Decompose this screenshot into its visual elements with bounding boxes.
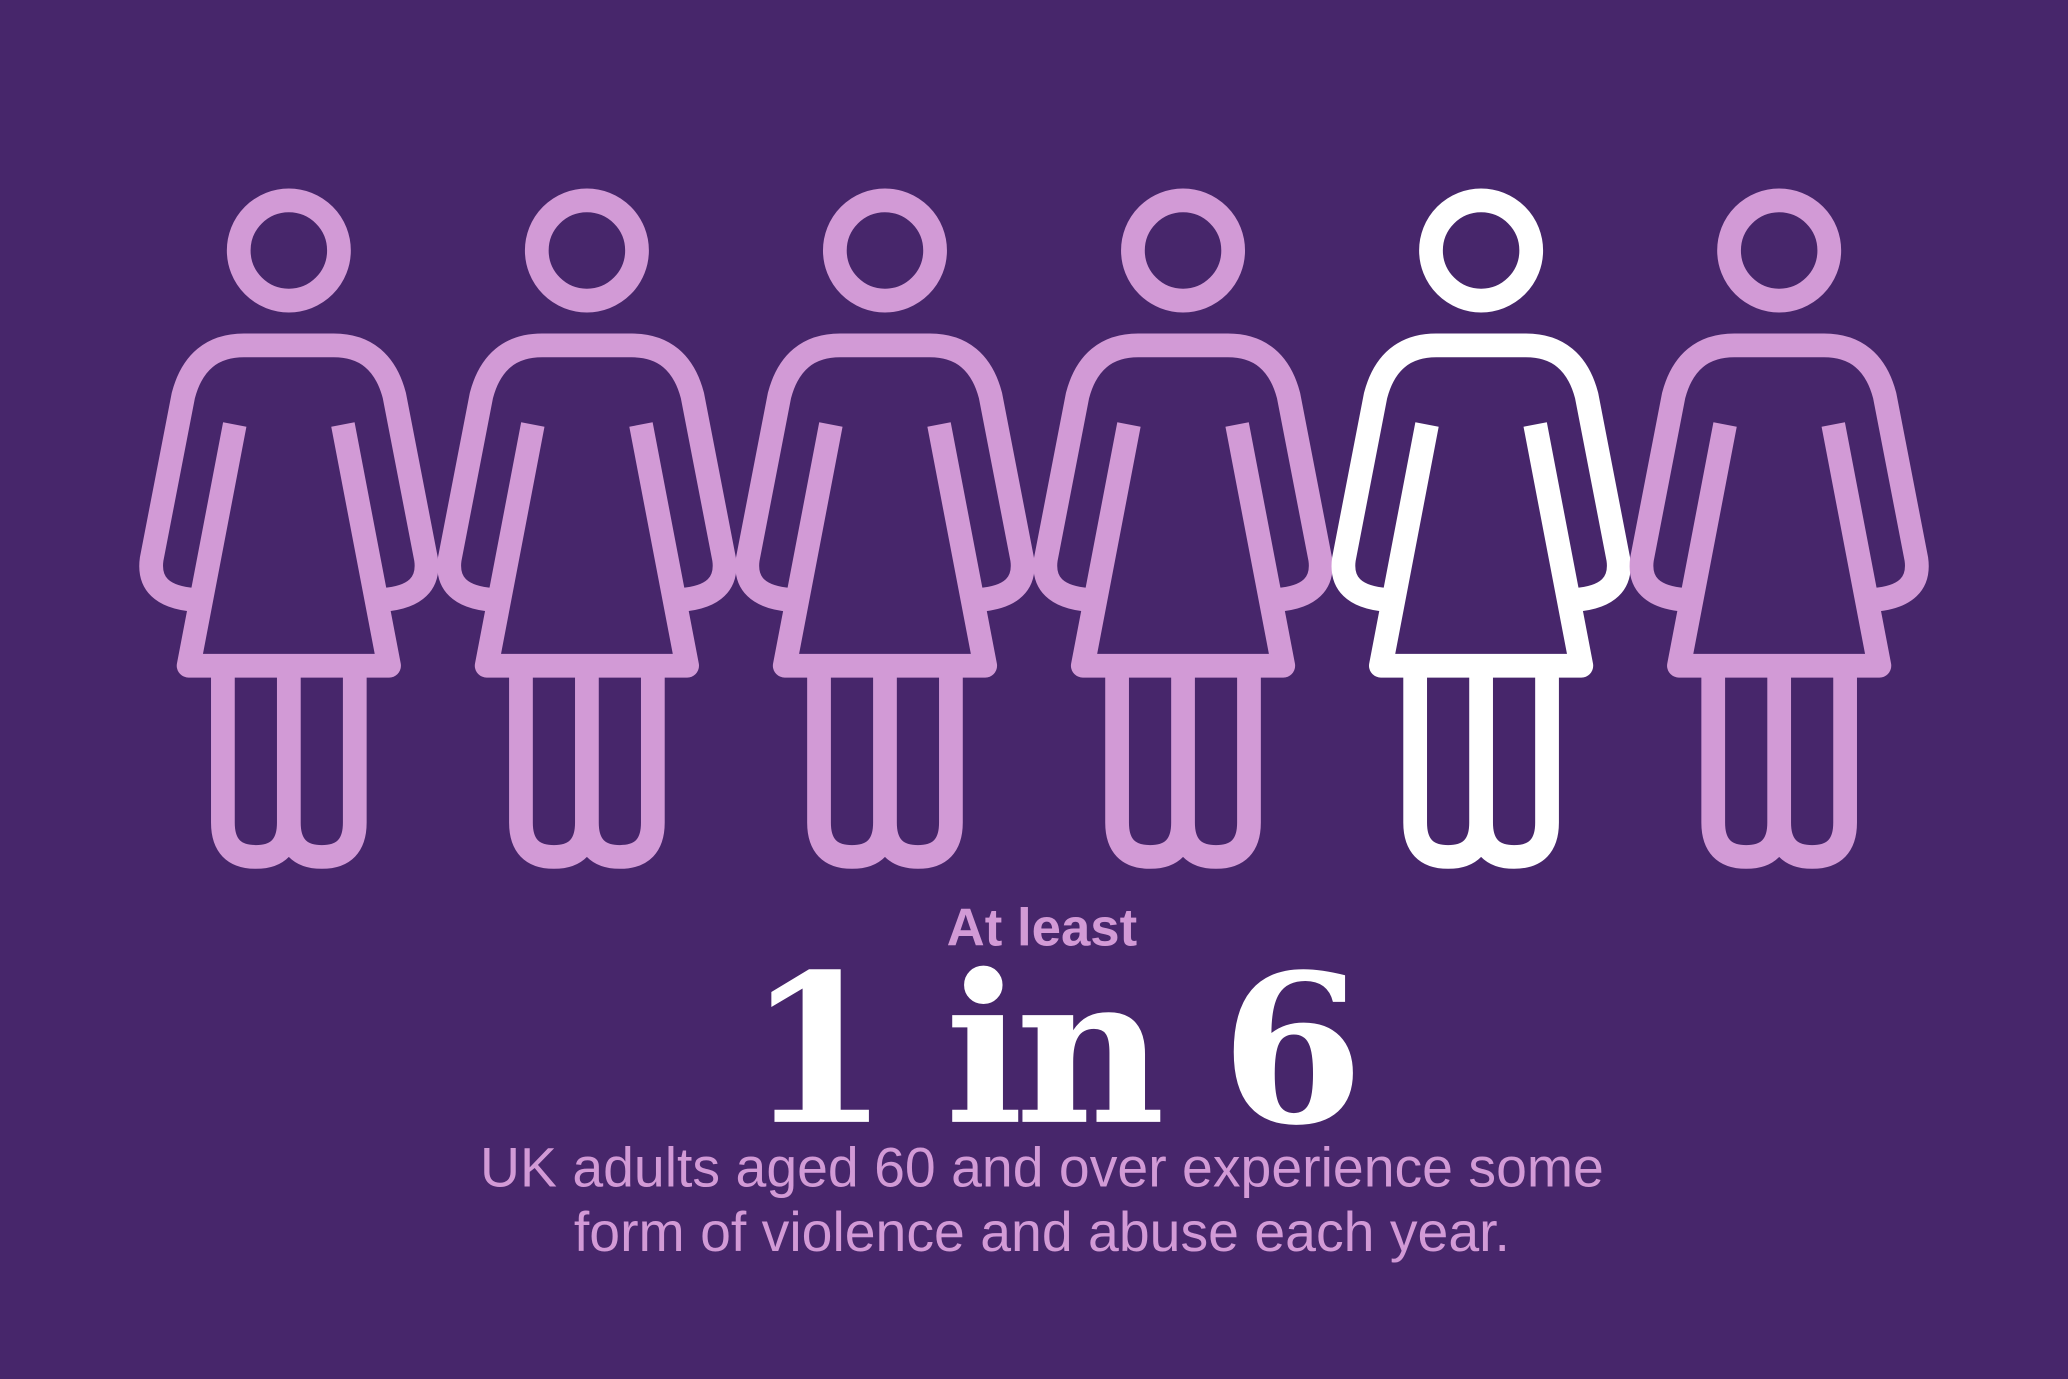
description: UK adults aged 60 and over experience some [480,1137,1604,1199]
description: form of violence and abuse each year. [574,1201,1510,1263]
figure 6 [1641,200,1917,857]
label: at least: At least [947,898,1137,957]
figure 2 [449,200,725,857]
figure 4 [1045,200,1321,857]
figure 5 highlighted [1343,200,1619,857]
headline stat: 1 in 6 [746,929,1356,1171]
figure 1 [151,200,427,857]
figure 3 [747,200,1023,857]
